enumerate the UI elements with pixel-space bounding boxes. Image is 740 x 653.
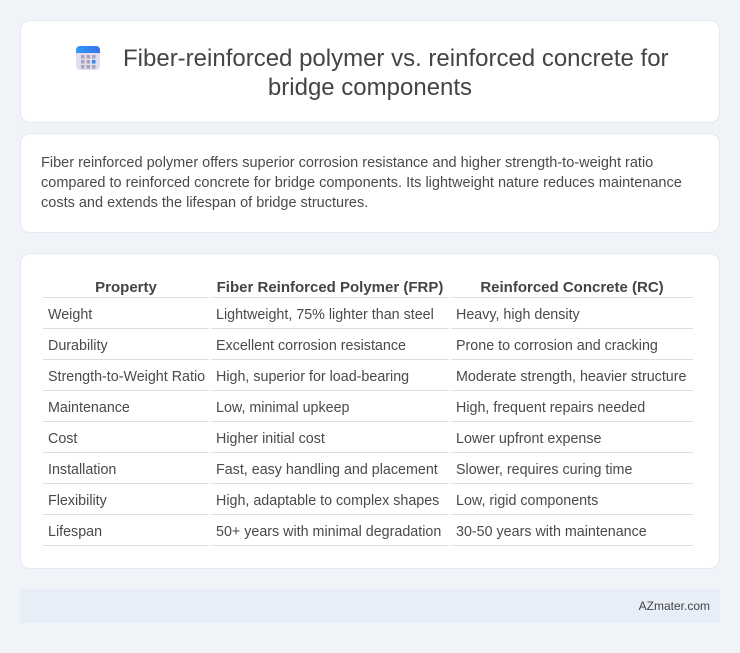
summary text: compared to reinforced concrete for bridge components. Its lightweight nature reduces maintenance [41,175,682,191]
row: installation [48,462,632,478]
title: bridge components [268,74,472,101]
comparison table [43,279,693,546]
row: cost: Cost [48,431,77,447]
row: installation: Slower, requires curing time [456,462,632,478]
table header [95,279,664,296]
row: cost [48,431,601,447]
row: durability [48,338,658,354]
row: flexibility: Low, rigid components [456,493,598,509]
row: strength-to-weight ratio [48,369,686,385]
summary text [41,155,682,211]
footer source text: AZmater.com [639,599,710,613]
panel: comparison table card [20,253,720,569]
table header: Property [95,279,157,296]
row: maintenance: Maintenance [48,400,130,416]
row: weight: Weight [48,307,92,323]
summary text: costs and extends the lifespan of bridge structures. [41,195,368,211]
table header: Fiber Reinforced Polymer (FRP) [217,279,443,296]
icon: calendar [76,46,100,70]
row: lifespan: 50+ years with minimal degradation [216,524,441,540]
row: weight: Lightweight, 75% lighter than steel [216,307,434,323]
row: cost: Lower upfront expense [456,431,601,447]
row: lifespan [48,524,647,540]
panel: title card [20,20,720,123]
row: strength-to-weight ratio: Moderate strength, heavier structure [456,369,686,385]
row: installation: Installation [48,462,116,478]
title [123,45,669,101]
row: installation: Fast, easy handling and placement [216,462,438,478]
row: flexibility: High, adaptable to complex shapes [216,493,439,509]
row: lifespan: 30-50 years with maintenance [456,524,647,540]
row: maintenance: High, frequent repairs needed [456,400,645,416]
summary text: Fiber reinforced polymer offers superior corrosion resistance and higher strength-to-weight ratio [41,155,653,171]
table header: Reinforced Concrete (RC) [480,279,664,296]
row: maintenance [48,400,645,416]
row: flexibility: Flexibility [48,493,107,509]
row: durability: Prone to corrosion and cracking [456,338,658,354]
row: flexibility [48,493,598,509]
row: strength-to-weight ratio: High, superior for load-bearing [216,369,409,385]
row: durability: Excellent corrosion resistance [216,338,406,354]
footer bar [20,589,720,623]
row: lifespan: Lifespan [48,524,102,540]
title: Fiber-reinforced polymer vs. reinforced concrete for [123,45,669,72]
row: weight [48,307,580,323]
row: weight: Heavy, high density [456,307,580,323]
row: durability: Durability [48,338,108,354]
panel: summary card [20,133,720,233]
row: cost: Higher initial cost [216,431,325,447]
row: maintenance: Low, minimal upkeep [216,400,350,416]
row: strength-to-weight ratio: Strength-to-Weight Ratio [48,369,205,385]
